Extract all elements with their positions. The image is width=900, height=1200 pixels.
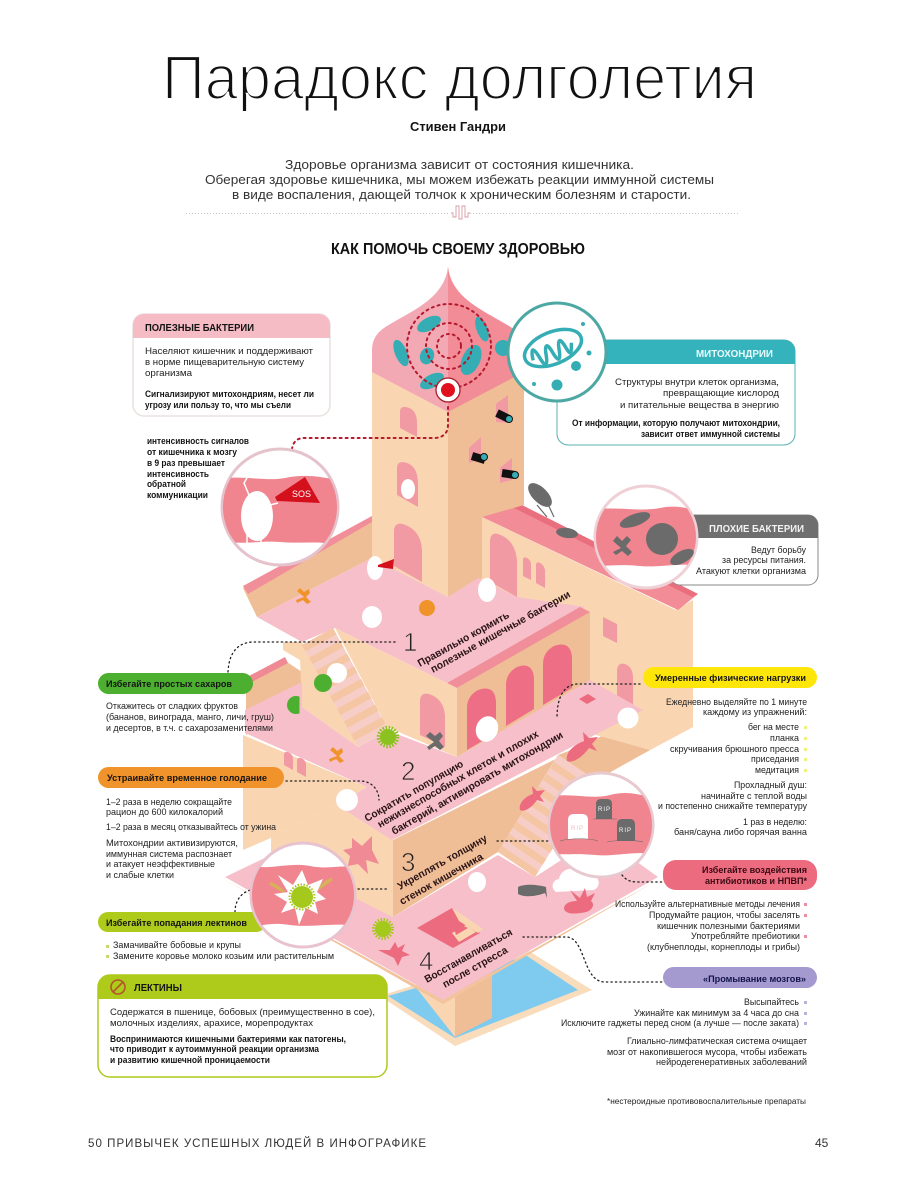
panel: beneficial bacteria: в норме пищеварительную систему [145, 357, 304, 367]
tower windows [394, 395, 512, 582]
tower walls [372, 370, 524, 597]
tower [372, 266, 524, 597]
roof bacteria [524, 479, 579, 539]
panel: harmful bacteria: за ресурсы питания. [722, 555, 806, 565]
signal intensity note: от кишечника к мозгу [147, 447, 238, 457]
footer title: 50 ПРИВЫЧЕК УСПЕШНЫХ ЛЮДЕЙ В ИНФОГРАФИКЕ [88, 1137, 426, 1150]
panel: harmful bacteria [590, 486, 818, 588]
tombstones: RIP [598, 807, 611, 813]
panel: brain washing: Высыпайтесь [744, 997, 799, 1007]
panel: mitochondria: МИТОХОНДРИИ [696, 348, 773, 360]
intro text: Здоровье организма зависит от состояния кишечника. [285, 158, 634, 172]
panel: moderate exercise: 1 раз в неделю: [743, 817, 807, 827]
panel: avoid antibiotics: кишечник полезными бактериями [657, 921, 800, 931]
panel: brain washing: Ужинайте как минимум за 4 часа до сна [634, 1008, 800, 1018]
pool and pillar [380, 950, 592, 1046]
panel: brain washing: нейродегенеративных заболеваний [656, 1057, 807, 1067]
panel: lectins: и развитию кишечной проницаемости [110, 1055, 270, 1065]
panel: beneficial bacteria: организма [145, 368, 193, 378]
panel: harmful bacteria: Атакуют клетки организма [696, 566, 807, 576]
teal mitochondria on dome [390, 312, 492, 393]
panel: moderate exercise: планка [770, 733, 800, 743]
cloud and burst [553, 869, 599, 914]
pipes [472, 413, 518, 478]
panel: avoid simple sugars: и десертов, в т.ч. с сахарозаменителями [106, 723, 273, 733]
author: Стивен Гандри [410, 120, 506, 134]
step labels [362, 589, 573, 991]
SOS circle [215, 449, 345, 565]
pink splat [378, 942, 410, 966]
panel: beneficial bacteria: ПОЛЕЗНЫЕ БАКТЕРИИ [145, 322, 254, 334]
SOS circle: SOS [292, 489, 311, 499]
panel: lectins: ЛЕКТИНЫ [134, 982, 182, 994]
step 2: нежизнеспособных клеток и плохих [376, 728, 541, 831]
divider with squiggle [186, 206, 738, 219]
harmful bacteria circle [590, 486, 705, 588]
panel: avoid simple sugars [98, 673, 274, 733]
panel: lectins: Содержатся в пшенице, бобовых (преимущественно в сое), [110, 1007, 375, 1018]
middle floor [245, 680, 643, 840]
signal intensity note: коммуникации [147, 490, 208, 500]
footnote: *нестероидные противовоспалительные препараты [607, 1097, 806, 1106]
panel: intermittent fasting: Митохондрии активизируются, [106, 838, 238, 848]
signal intensity note: обратной [147, 479, 186, 489]
step 1: полезные кишечные бактерии [429, 589, 573, 676]
panel: moderate exercise: и постепенно снижайте температуру [658, 801, 807, 811]
lower stairs [498, 755, 595, 877]
lower block faces [243, 690, 693, 917]
step 3: Укреплять толщину [396, 832, 490, 893]
back wall terrace [243, 516, 372, 747]
panel: beneficial bacteria: Населяют кишечник и поддерживают [145, 346, 314, 356]
step 2: бактерий, активировать митохондрии [390, 729, 565, 838]
panel: brain washing: мозг от накопившегося мусора, чтобы избежать [607, 1047, 807, 1057]
step 4: после стресса [441, 944, 510, 991]
panel: beneficial bacteria [133, 314, 330, 416]
signal intensity note: в 9 раз превышает [147, 458, 225, 468]
panel: avoid antibiotics: Продумайте рацион, чтобы заселять [649, 910, 800, 920]
panel: moderate exercise: каждому из упражнений: [703, 707, 807, 717]
panel: intermittent fasting: Устраивайте временное голодание [107, 773, 267, 784]
red dashed rings [407, 304, 491, 388]
panel: avoid lectins: Замачивайте бобовые и крупы [113, 940, 241, 950]
page number: 45 [815, 1136, 829, 1150]
panel: intermittent fasting: 1–2 раза в неделю сокращайте [106, 797, 232, 807]
lower floor [225, 835, 658, 1004]
panel: intermittent fasting: и атакует неэффективные [106, 859, 215, 869]
panel: moderate exercise [643, 667, 817, 837]
panel: mitochondria [495, 303, 795, 445]
panel: avoid simple sugars: (бананов, винограда, манго, личи, груш) [106, 712, 274, 722]
connector lines [228, 407, 662, 982]
step 4: Восстанавливаться [423, 926, 515, 986]
panel: avoid lectins [98, 912, 334, 961]
red signal line [292, 407, 448, 449]
fish [520, 732, 598, 811]
panel: avoid antibiotics: Употребляйте пребиотики [691, 931, 800, 941]
upper stairs [302, 628, 389, 747]
panel: avoid lectins: Замените коровье молоко козьим или растительным [113, 951, 334, 961]
panel: mitochondria: и питательные вещества в энергию [620, 400, 779, 410]
panel: brain washing: «Промывание мозгов» [703, 974, 806, 985]
title: Парадокс долголетия [162, 44, 757, 113]
white bacteria [327, 578, 638, 892]
panel: avoid simple sugars: Избегайте простых сахаров [106, 679, 232, 690]
panel: beneficial bacteria: Сигнализируют митохондриям, несет ли [145, 389, 314, 399]
panel: moderate exercise: приседания [751, 754, 799, 764]
red target [436, 378, 460, 402]
panel: mitochondria: зависит ответ иммунной системы [641, 429, 780, 439]
panel: avoid antibiotics [615, 860, 817, 952]
panel: brain washing: Исключите гаджеты перед сном (а лучше — после заката) [561, 1018, 799, 1028]
floor icons and bacteria [287, 556, 638, 966]
panel: intermittent fasting [98, 767, 284, 880]
panel: mitochondria: Структуры внутри клеток организма, [615, 377, 779, 387]
right building roof [482, 494, 698, 610]
panel: avoid antibiotics: Избегайте воздействия [702, 865, 807, 876]
panel: moderate exercise: баня/сауна либо горячая ванна [674, 827, 808, 837]
icon: prohibition sign [111, 980, 125, 994]
green shapes [287, 674, 398, 938]
step 2: 2 [401, 756, 415, 786]
step 4: 4 [419, 946, 433, 976]
pink diamond [579, 694, 596, 704]
section heading: КАК ПОМОЧЬ СВОЕМУ ЗДОРОВЬЮ [331, 241, 585, 258]
panel: moderate exercise: Умеренные физические нагрузки [655, 673, 806, 684]
megaphone bacterium [367, 556, 394, 580]
panel: lectins: молочных изделиях, арахисе, морепродуктах [110, 1018, 313, 1029]
panel: avoid antibiotics: антибиотиков и НПВП* [705, 876, 807, 887]
signal intensity note: интенсивность [147, 469, 209, 479]
tombstones [560, 799, 643, 842]
gut wall circle [250, 843, 356, 947]
signal intensity note [147, 436, 249, 500]
panel: moderate exercise: Прохладный душ: [734, 780, 807, 790]
panel: lectins: что приводит к аутоиммунной реакции организма [110, 1044, 320, 1054]
panel: brain washing [561, 967, 817, 1067]
panel: avoid antibiotics: (клубнеплоды, корнеплоды и грибы) [647, 942, 800, 952]
intro text: Оберегая здоровье кишечника, мы можем избежать реакции иммунной системы [205, 173, 714, 187]
panel: intermittent fasting: и слабые клетки [106, 870, 174, 880]
intro text: в виде воспаления, дающей толчок к хроническим болезням и старости. [232, 188, 691, 202]
panel: harmful bacteria: ПЛОХИЕ БАКТЕРИИ [709, 523, 804, 535]
bacterium in window [401, 479, 415, 499]
orange shapes [296, 588, 435, 763]
panel: harmful bacteria: Ведут борьбу [751, 545, 806, 555]
small windows lower-left [284, 752, 306, 777]
panel: intermittent fasting: рацион до 600 килокалорий [106, 807, 223, 817]
isometric building [225, 266, 698, 1046]
right building wall [470, 517, 693, 750]
panel: intermittent fasting: иммунная система распознает [106, 849, 233, 859]
panel: intermittent fasting: 1–2 раза в месяц отказывайтесь от ужина [106, 822, 277, 832]
step 3: стенок кишечника [398, 851, 485, 908]
signal intensity note: интенсивность сигналов [147, 436, 249, 446]
panel: moderate exercise: скручивания брюшного пресса [670, 744, 800, 754]
step 2: Сократить популяцию [362, 758, 466, 825]
tombstones: RIP [571, 826, 584, 832]
RIP circle [548, 773, 655, 877]
panel: moderate exercise: начинайте с теплой воды [701, 791, 807, 801]
panel: lectins: Воспринимаются кишечными бактериями как патогены, [110, 1034, 346, 1044]
panel: mitochondria: превращающие кислород [663, 388, 780, 398]
panel: avoid antibiotics: Используйте альтернативные методы лечения [615, 899, 800, 909]
panel: brain washing: Глиально-лимфатическая система очищает [627, 1036, 808, 1046]
step 3: 3 [401, 847, 415, 877]
upper terrace floor [257, 558, 585, 683]
mitochondrion circle [508, 303, 606, 401]
tower dome [372, 266, 524, 412]
panel: avoid simple sugars: Откажитесь от сладких фруктов [106, 701, 238, 711]
panel: moderate exercise: бег на месте [748, 722, 799, 732]
step 1: 1 [403, 627, 417, 657]
panel: moderate exercise: Ежедневно выделяйте по 1 минуте [666, 697, 807, 707]
slug [518, 885, 547, 898]
step 1: Правильно кормить [416, 609, 512, 670]
middle building [335, 607, 590, 757]
floor hole [417, 908, 483, 948]
panel: moderate exercise: медитация [755, 765, 799, 775]
intro text [205, 158, 714, 202]
panel: lectins [98, 975, 387, 1077]
grey X [426, 732, 444, 750]
panel: mitochondria: От информации, которую получают митохондрии, [572, 418, 780, 428]
pink burst [343, 836, 379, 874]
panel: beneficial bacteria: угрозу или пользу то, что мы съели [145, 400, 291, 410]
tombstones: RIP [619, 828, 632, 834]
panel: avoid lectins: Избегайте попадания лектинов [106, 918, 247, 929]
